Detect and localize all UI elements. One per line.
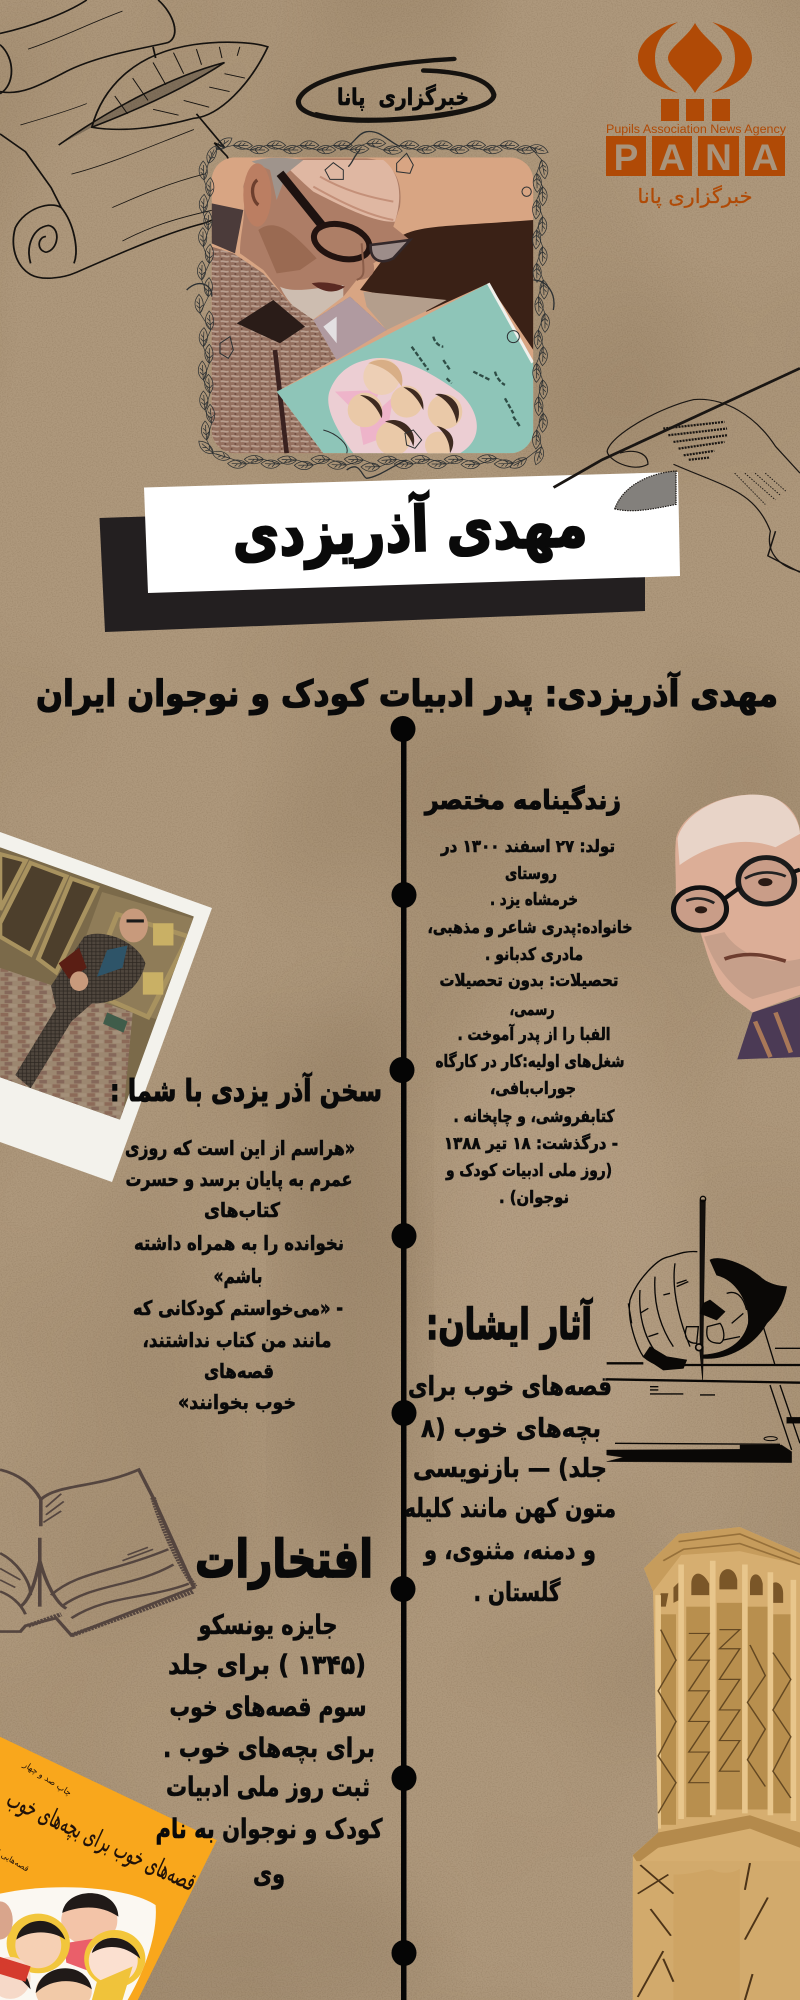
honours text: کودک و نوجوان به نام bbox=[156, 1814, 383, 1845]
quotes text: کتاب‌های bbox=[204, 1198, 280, 1222]
quotes text bbox=[125, 1136, 355, 1414]
news agency label with brush ellipse bbox=[298, 59, 494, 121]
works text: و دمنه، مثنوی، و bbox=[422, 1536, 596, 1566]
banner card bbox=[144, 472, 680, 593]
works text: جلد) — بازنویسی bbox=[413, 1454, 607, 1484]
logo PANA letters: N bbox=[705, 137, 732, 178]
honours text: (۱۳۴۵ ) برای جلد bbox=[168, 1650, 366, 1681]
quotes text: مانند من کتاب نداشتند، bbox=[142, 1328, 332, 1352]
panel: biography bbox=[423, 785, 632, 1208]
biography text: نوجوان) . bbox=[499, 1188, 569, 1208]
polaroid picture bbox=[0, 847, 204, 1124]
panel: works bbox=[404, 1298, 616, 1608]
biography text: رسمی، bbox=[510, 1000, 554, 1020]
portrait photo with floral frame bbox=[187, 131, 554, 478]
honours text: برای بچه‌های خوب . bbox=[163, 1733, 375, 1764]
quotes text: عمرم به پایان برسد و حسرت bbox=[126, 1167, 352, 1192]
quotes heading: سخن آذر یزدی با شما : bbox=[110, 1072, 382, 1109]
photo of Azaryazdi reading bbox=[212, 157, 533, 458]
illustration: open book bbox=[0, 1470, 195, 1635]
cover artwork bbox=[0, 1737, 217, 2000]
illustration: Dowlat Abad windcatcher tower bbox=[633, 1526, 800, 2000]
timeline dots bbox=[390, 716, 416, 1966]
floral frame bbox=[187, 131, 554, 478]
quotes text: باشم» bbox=[214, 1264, 262, 1288]
quotes text: نخوانده را به همراه داشته bbox=[134, 1231, 344, 1255]
timeline axis bbox=[401, 722, 406, 2000]
illustration: parchment scroll and feather bbox=[0, 0, 268, 278]
illustration: orange storybook cover bbox=[0, 1737, 217, 2000]
works text bbox=[404, 1372, 616, 1608]
brush ellipse bbox=[298, 59, 494, 121]
honours text: وی bbox=[253, 1859, 285, 1890]
quotes text: قصه‌های bbox=[204, 1359, 274, 1383]
biography text: روستای bbox=[505, 864, 557, 884]
biography text: تولد: ۲۷ اسفند ۱۳۰۰ در bbox=[440, 837, 615, 857]
biography text bbox=[428, 837, 632, 1208]
works text: بچه‌های خوب (۸ bbox=[421, 1414, 601, 1444]
panel: quotes bbox=[110, 1072, 382, 1414]
biography text: مادری کدبانو . bbox=[485, 945, 583, 965]
logo english caption: Pupils Association News Agency bbox=[606, 124, 786, 136]
logo emblem bbox=[606, 22, 785, 176]
works text: گلستان . bbox=[474, 1577, 561, 1608]
logo persian caption: خبرگزاری پانا bbox=[638, 184, 752, 209]
biography text: جوراب‌بافی، bbox=[490, 1079, 576, 1099]
biography text: الفبا را از پدر آموخت . bbox=[458, 1023, 610, 1045]
logo PANA letters bbox=[614, 137, 778, 178]
logo PANA letters: P bbox=[614, 137, 638, 178]
panel: honours bbox=[156, 1530, 383, 1890]
honours text: سوم قصه‌های خوب bbox=[170, 1692, 366, 1723]
illustration: hand with quill bbox=[554, 368, 800, 572]
biography text: شغل‌های اولیه:کار در کارگاه bbox=[436, 1051, 624, 1072]
logo PANA letters: A bbox=[659, 137, 685, 178]
desk bbox=[607, 1363, 800, 1383]
quotes text: «هراسم از این است که روزی bbox=[125, 1136, 355, 1160]
biography text: (روز ملی ادبیات کودک و bbox=[445, 1161, 612, 1181]
cover edition: چاپ صد و چهار bbox=[20, 1759, 73, 1799]
honours text: ثبت روز ملی ادبیات bbox=[166, 1772, 370, 1803]
illustration: hand writing at desk bbox=[607, 1196, 800, 1463]
biography text: خرمشاه یزد . bbox=[490, 890, 578, 910]
works text: قصه‌های خوب برای bbox=[408, 1372, 612, 1402]
biography text: خانواده:پدری شاعر و مذهبی، bbox=[428, 918, 632, 938]
honours text: جایزه یونسکو bbox=[197, 1610, 338, 1641]
polaroid card bbox=[0, 832, 212, 1182]
biography text: - درگذشت: ۱۸ تیر ۱۳۸۸ bbox=[444, 1133, 618, 1154]
logo: PANA bbox=[606, 22, 786, 209]
title banner bbox=[100, 472, 680, 632]
biography text: کتابفروشی، و چاپخانه . bbox=[454, 1107, 615, 1127]
honours heading: افتخارات bbox=[195, 1530, 373, 1590]
quotes text: - «می‌خواستم کودکانی که bbox=[133, 1296, 343, 1320]
banner shadow bbox=[100, 500, 645, 632]
biography heading: زندگینامه مختصر bbox=[423, 785, 621, 816]
works heading: آثار ایشان: bbox=[426, 1298, 593, 1350]
honours text bbox=[156, 1610, 383, 1890]
logo PANA letters: A bbox=[752, 137, 778, 178]
banner name: مهدی آذریزدی bbox=[231, 486, 588, 571]
hand bbox=[628, 1252, 724, 1368]
biography text: تحصیلات: بدون تحصیلات bbox=[440, 971, 618, 991]
polaroid: animated portrait in library bbox=[0, 832, 212, 1182]
works text: متون کهن مانند کلیله bbox=[404, 1494, 616, 1524]
quotes text: خوب بخوانند» bbox=[178, 1390, 296, 1414]
timeline bbox=[390, 716, 416, 2000]
cover title: قصه‌های خوب برای بچه‌های خوب bbox=[3, 1784, 201, 1897]
label text: خبرگزاری پانا bbox=[337, 84, 469, 111]
pen bbox=[699, 1200, 705, 1380]
illustration: portrait cutout bbox=[673, 795, 800, 1059]
